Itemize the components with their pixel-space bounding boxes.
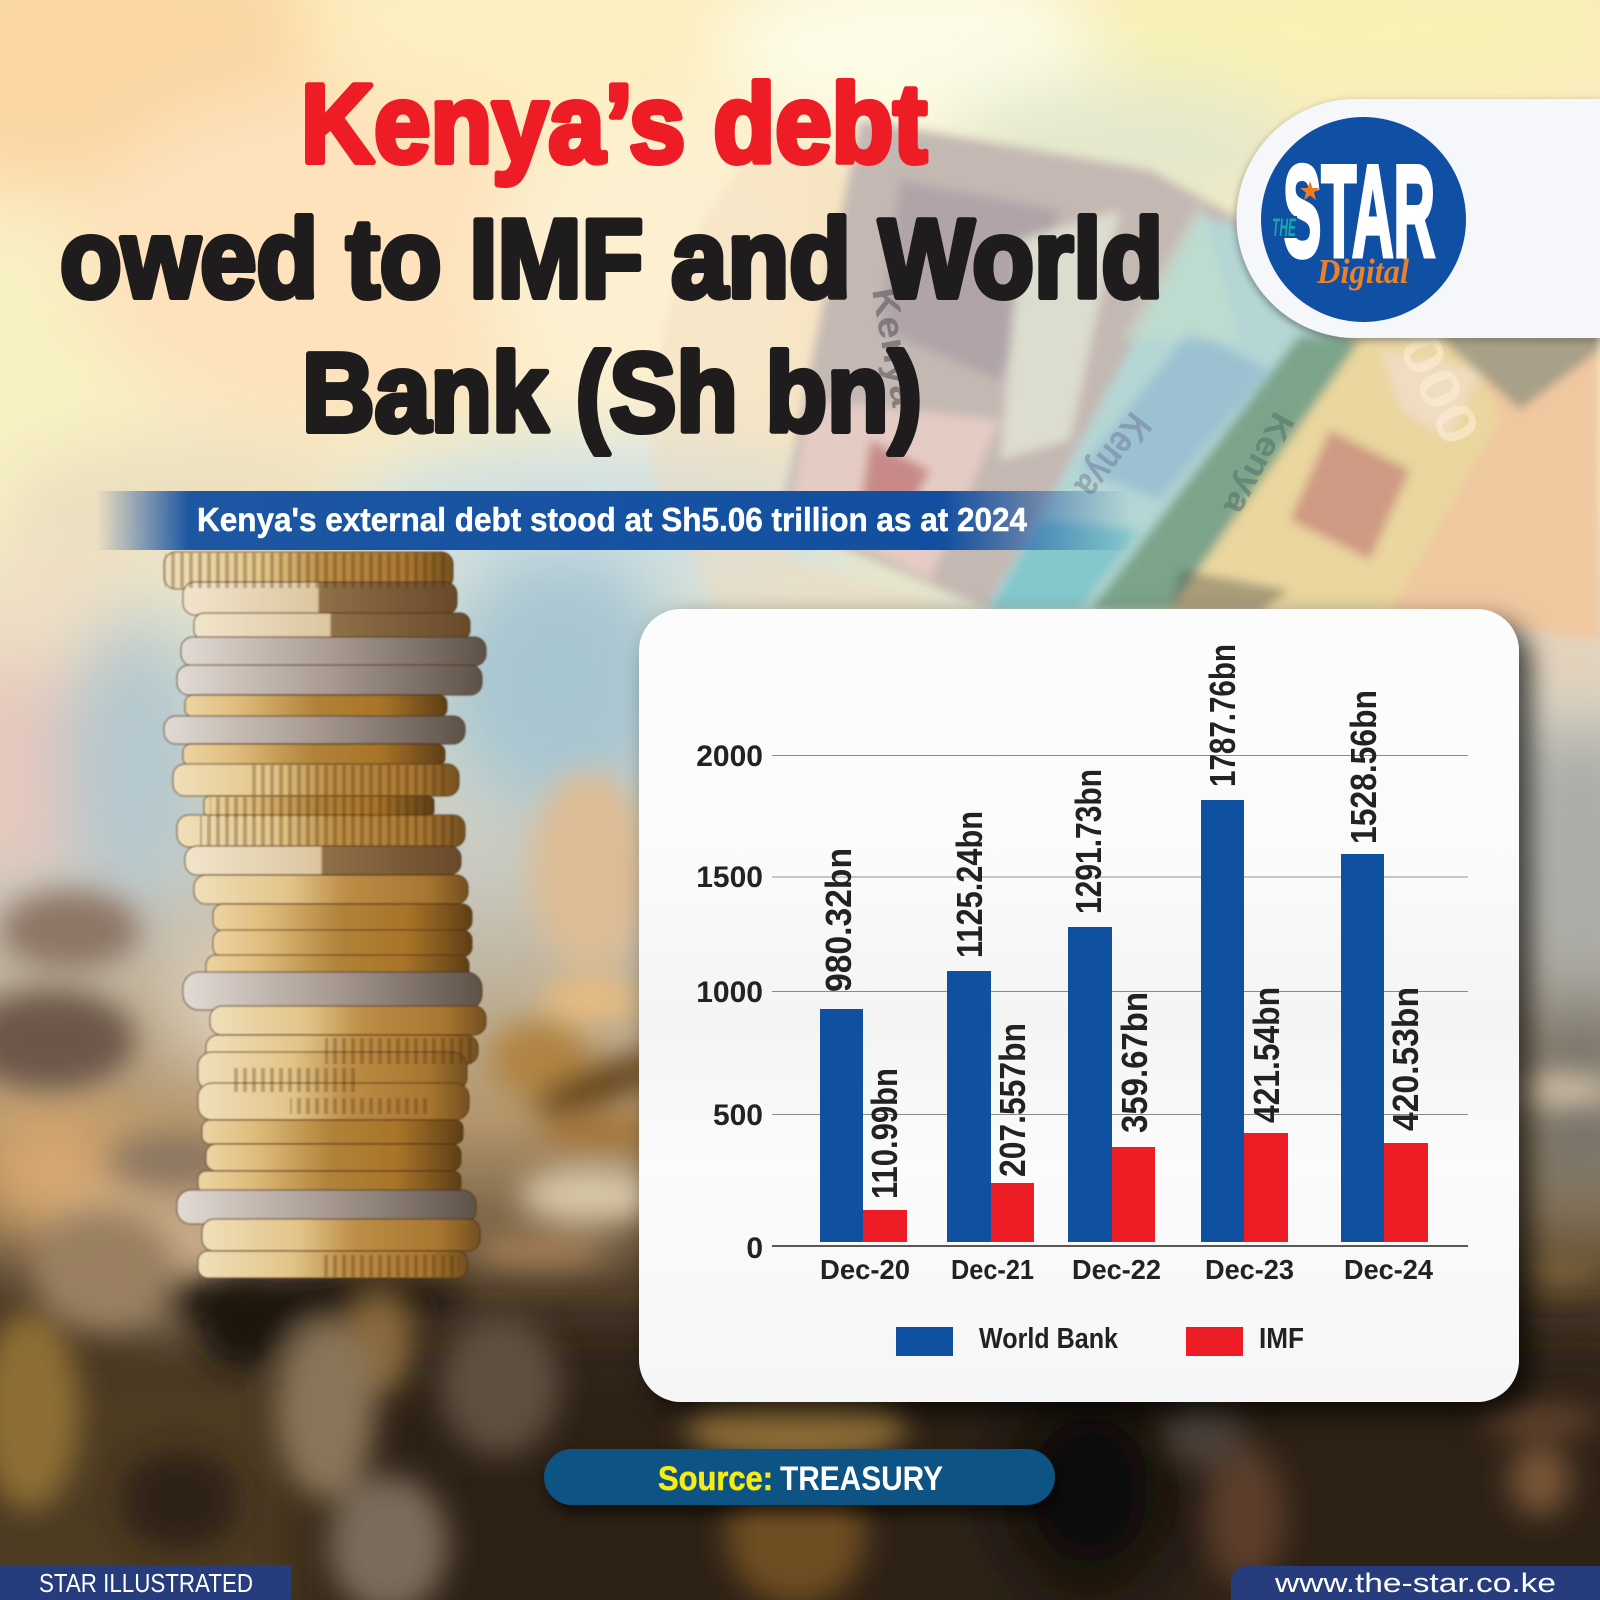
banknote wording: Kenya <box>1066 404 1160 507</box>
legend <box>896 1323 1304 1356</box>
bar value labels <box>818 644 1426 1199</box>
title line 1: Kenya’s debt <box>301 62 927 186</box>
x axis labels: Dec-22 <box>1072 1254 1161 1285</box>
footer website: www.the-star.co.ke <box>1274 1568 1556 1598</box>
title line 3: Bank (Sh bn) <box>302 331 922 455</box>
bar value labels: 420.53bn <box>1385 987 1426 1131</box>
bar value labels: 359.67bn <box>1114 992 1155 1133</box>
legend label: World Bank: World Bank <box>979 1323 1119 1355</box>
legend label: IMF: IMF <box>1259 1323 1304 1355</box>
logo panel <box>1236 99 1600 338</box>
logo circle <box>1261 117 1466 322</box>
legend swatch: World Bank <box>896 1327 953 1356</box>
source pill <box>544 1449 1055 1505</box>
bar value labels: 1291.73bn <box>1068 769 1109 914</box>
y axis labels: 0 <box>746 1232 763 1265</box>
logo pill background <box>1236 99 1600 338</box>
y axis labels: 500 <box>713 1099 763 1132</box>
title <box>60 62 1163 455</box>
logo word THE patch and text: THE <box>1272 214 1297 242</box>
footer tag right <box>1231 1566 1600 1600</box>
y axis labels <box>696 740 763 1265</box>
chart panel <box>639 609 1519 1402</box>
bars: IMF <box>863 1133 1428 1242</box>
x axis labels: Dec-24 <box>1344 1254 1433 1285</box>
banknotes and hands <box>653 120 1600 640</box>
subtitle text: Kenya's external debt stood at Sh5.06 trillion as at 2024 <box>197 501 1028 538</box>
banknote wording <box>864 284 1493 522</box>
bar value labels: 1125.24bn <box>949 811 990 958</box>
bar value labels: 207.557bn <box>992 1023 1033 1177</box>
banknote wording: Kenya <box>864 284 926 411</box>
x axis labels: Dec-21 <box>951 1254 1034 1285</box>
subtitle banner <box>96 491 1130 550</box>
logo word THE patch and text <box>1268 214 1297 242</box>
coin stack <box>164 552 486 1278</box>
logo star icon <box>1300 181 1320 200</box>
source label: Source: <box>658 1460 773 1498</box>
y axis labels: 2000 <box>696 740 763 773</box>
bar value labels: 1528.56bn <box>1343 690 1384 844</box>
banknote wording: 000 <box>1387 323 1493 454</box>
y axis labels: 1500 <box>696 861 763 894</box>
legend swatch: IMF <box>1186 1327 1243 1356</box>
footer tag left <box>0 1565 291 1600</box>
footer text left: STAR ILLUSTRATED <box>39 1568 253 1598</box>
banknote wording: Kenya <box>1216 406 1301 522</box>
gridlines <box>772 756 1468 1246</box>
bar value labels: 1787.76bn <box>1202 644 1243 787</box>
logo word Digital: Digital <box>1316 252 1409 291</box>
x axis labels <box>820 1254 1433 1285</box>
bars: World Bank <box>820 800 1384 1242</box>
source value: TREASURY <box>780 1460 943 1498</box>
bar value labels: 980.32bn <box>818 848 859 992</box>
x axis labels: Dec-20 <box>820 1254 910 1285</box>
y axis labels: 1000 <box>696 976 763 1009</box>
bar value labels: 421.54bn <box>1246 987 1287 1123</box>
title line 2: owed to IMF and World <box>60 197 1163 321</box>
x axis labels: Dec-23 <box>1205 1254 1294 1285</box>
bar value labels: 110.99bn <box>864 1068 905 1199</box>
